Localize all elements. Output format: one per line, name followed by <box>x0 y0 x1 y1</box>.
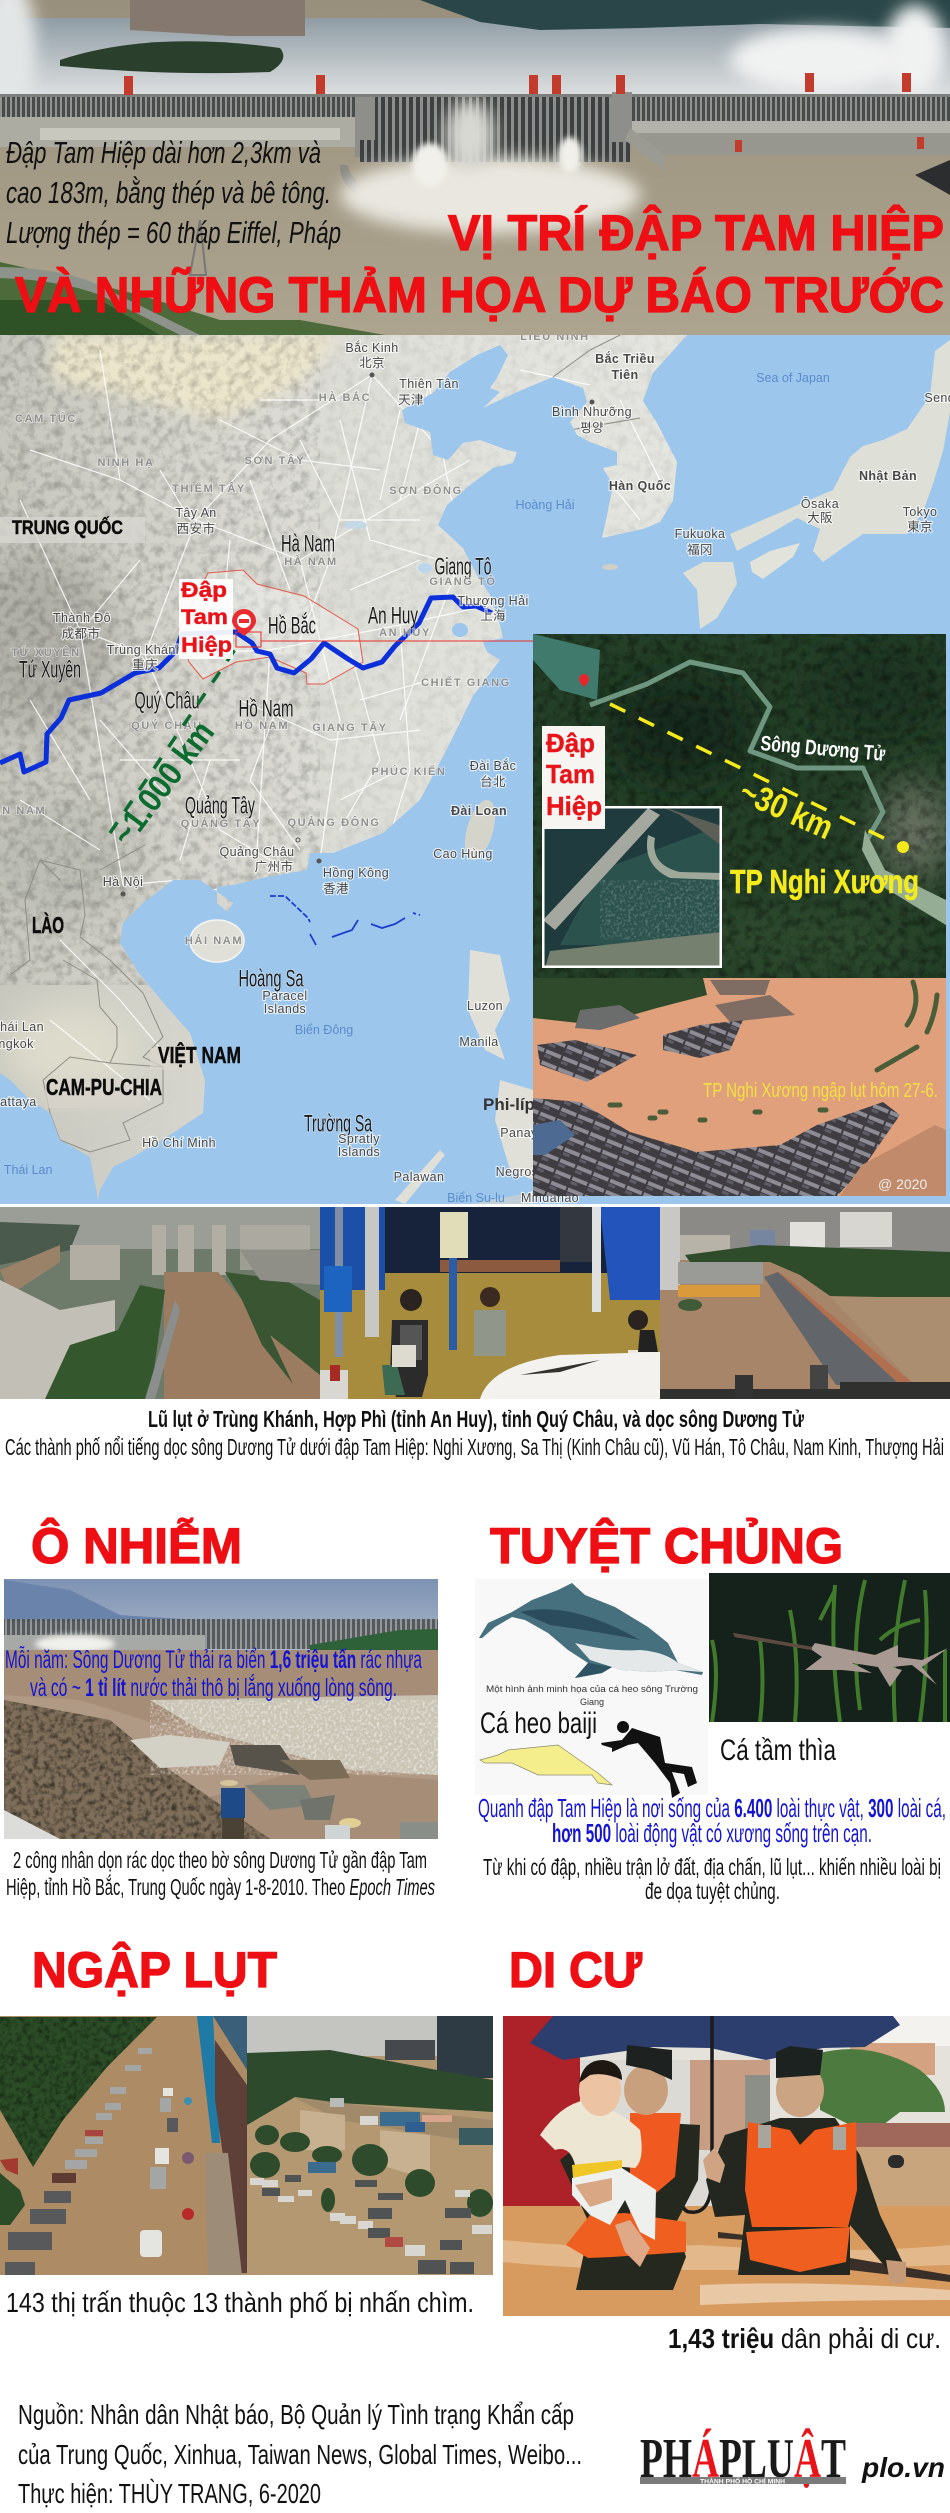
map labels: Panay <box>500 1126 538 1140</box>
map labels: GIANG TÔ <box>429 575 497 588</box>
map labels: Negros <box>496 1165 538 1179</box>
map labels: Đài Loan <box>451 804 507 818</box>
map labels: 大阪 <box>807 511 833 525</box>
photo: paddlefish <box>709 1573 950 1722</box>
map labels: GIANG TÂY <box>312 721 388 734</box>
heading: flooding: NGẬP LỤT <box>32 1942 277 1998</box>
label: Đập Tam Hiệp on satellite: Tam <box>546 759 595 789</box>
map labels: Hà Nam <box>281 530 335 558</box>
label: 30 km: ~30 km <box>734 773 839 847</box>
river traces at sea <box>270 896 420 945</box>
map labels: Hồng Kông <box>323 866 389 880</box>
icon: dam location pin <box>232 609 256 636</box>
map labels: Bình Nhưỡng <box>552 405 632 419</box>
map labels: Phi-líp <box>483 1095 535 1114</box>
map labels: Spratly <box>338 1132 380 1146</box>
text: sources and credit <box>18 2399 582 2509</box>
Hubei province outline <box>179 570 363 684</box>
umbrella <box>530 2016 900 2060</box>
label: Đập Tam Hiệp on satellite: Hiệp <box>546 791 602 821</box>
map labels: Cao Hùng <box>433 847 493 861</box>
map labels: Sea of Japan <box>756 371 830 385</box>
map labels: Bắc Kinh <box>345 340 399 355</box>
text: sources and credit: Nguồn: Nhân dân Nhật báo, Bộ Quản lý Tình trạng Khẩn cấp <box>18 2399 574 2430</box>
map labels: PHÚC KIẾN <box>372 765 446 778</box>
text: dam facts: Lượng thép = 60 tháp Eiffel, Pháp <box>6 215 341 250</box>
map labels: Biển Đông <box>295 1023 353 1037</box>
label: Đập Tam Hiệp on satellite <box>542 726 605 829</box>
map labels: Tiên <box>611 368 639 382</box>
text: dam facts <box>6 135 341 250</box>
caption: dolphin illustration: Giang <box>580 1697 604 1707</box>
label: Đập Tam Hiệp on map <box>179 579 233 659</box>
map labels: Đài Bắc <box>470 758 516 773</box>
icon: diver silhouette <box>601 1721 697 1798</box>
map labels: Thành Đô <box>53 611 111 625</box>
map labels: Nhật Bản <box>859 469 917 483</box>
map labels: Luzon <box>467 999 503 1013</box>
map labels: 北京 <box>359 356 385 370</box>
map labels: 广州市 <box>255 859 293 874</box>
heading: migration: DI CƯ <box>509 1942 642 1998</box>
locator link from dam to inset <box>236 632 533 647</box>
map labels: Bắc Triều <box>595 351 655 366</box>
map labels: Giang Tô <box>434 554 492 580</box>
map labels: 東京 <box>907 520 933 534</box>
map labels: Quý Châu <box>134 688 200 714</box>
text: dam facts: Đập Tam Hiệp dài hơn 2,3km và <box>6 135 321 170</box>
map labels: Islands <box>338 1145 380 1159</box>
map labels: 西安市 <box>177 521 215 536</box>
map labels: Mindanao <box>521 1191 579 1205</box>
caption: garbage photo <box>6 1847 435 1900</box>
map labels: 天津 <box>398 393 424 407</box>
photo: flooded car park <box>247 2016 493 2275</box>
caption: dolphin illustration: Một hình ảnh minh họa của cá heo sông Trường <box>486 1684 698 1694</box>
photo: flooded street <box>0 2016 247 2275</box>
map labels: Paracel <box>262 989 308 1003</box>
map labels: Hồ Nam <box>238 696 294 722</box>
caption: towns submerged: 143 thị trấn thuộc 13 thành phố bị nhấn chìm. <box>6 2287 474 2318</box>
map labels: 重庆 <box>132 657 158 672</box>
map labels: Tây An <box>175 506 217 520</box>
panel: map of China and East Asia <box>0 330 950 1205</box>
map labels: TỨ XUYÊN <box>11 646 81 659</box>
distance line 1000 km: ~1.000 km <box>104 714 222 853</box>
text: sources and credit: của Trung Quốc, Xinhua, Taiwan News, Global Times, Weibo... <box>18 2439 582 2470</box>
map labels: Tokyo <box>903 505 937 519</box>
photo: flood in Hefei <box>320 1207 660 1399</box>
map labels: Hàn Quốc <box>609 479 671 493</box>
callout: waste figures <box>5 1645 422 1702</box>
title: VỊ TRÍ ĐẬP TAM HIỆP <box>448 205 944 261</box>
logo: plo.vn: plo.vn <box>861 2452 945 2483</box>
map labels: SƠN ĐÔNG <box>389 484 463 497</box>
map labels: Palawan <box>394 1170 444 1184</box>
map labels: NINH HẠ <box>97 457 155 469</box>
panel: flood photo of Yichang <box>533 978 946 1196</box>
photo: flood along Yangtze bridge <box>660 1207 950 1399</box>
text: dam facts: cao 183m, bằng thép và bê tông. <box>6 175 331 210</box>
map labels: Hà Nội <box>103 875 143 889</box>
map labels: An Huy <box>368 602 418 630</box>
photo: garbage along the Yangtze <box>4 1579 438 1840</box>
label: paddlefish: Cá tầm thìa <box>720 1734 836 1767</box>
heading: extinction: TUYỆT CHỦNG <box>490 1517 843 1574</box>
map labels: Islands <box>264 1002 306 1016</box>
map labels: CAM TÚC <box>15 412 77 425</box>
text: extinction threat: đe dọa tuyệt chủng. <box>645 1878 780 1904</box>
map labels: THIỂM TÂY <box>172 482 246 495</box>
caption: garbage photo: Hiệp, tỉnh Hồ Bắc, Trung Quốc ngày 1-8-2010. Theo Epoch Times <box>6 1874 435 1900</box>
panel: satellite inset <box>533 634 950 978</box>
map labels: HỒ NAM <box>235 719 289 732</box>
panel: hero photo of Three Gorges dam <box>0 0 950 335</box>
label: Đập Tam Hiệp on satellite: Đập <box>546 728 595 758</box>
map labels: Trường Sa <box>304 1110 372 1138</box>
text: sources and credit: Thực hiện: THÙY TRANG, 6-2020 <box>18 2478 321 2509</box>
country label: Lào: LÀO <box>32 911 64 938</box>
map labels: AN HUY <box>379 627 431 639</box>
map labels: Hồ Bắc <box>268 612 316 640</box>
title <box>15 205 944 323</box>
label: baiji: Cá heo baiji <box>480 1707 597 1740</box>
logo: Pháp Luật: THÀNH PHỐ HỒ CHÍ MINH <box>700 2478 785 2486</box>
photo: soldiers evacuating child under umbrella <box>503 2016 950 2316</box>
map labels: 香港 <box>323 882 349 896</box>
label: Đập Tam Hiệp on map: Tam <box>181 606 228 629</box>
map labels: QUẢNG ĐÔNG <box>288 816 380 829</box>
map labels: Quảng Châu <box>220 845 294 859</box>
map labels: Quảng Tây <box>185 792 255 820</box>
map labels: Hoàng Hải <box>515 498 575 512</box>
watermark: @ 2020 <box>878 1176 927 1192</box>
map labels: CHIẾT GIANG <box>421 676 511 689</box>
soldier left with child <box>540 2045 700 2290</box>
text: extinction threat <box>483 1854 941 1904</box>
map labels: Hồ Chí Minh <box>142 1136 216 1150</box>
country label: Cam-pu-chia: CAM-PU-CHIA <box>46 1074 162 1100</box>
map labels: Trùng Khánh <box>107 643 183 657</box>
illustration: baiji dolphin <box>479 1583 703 1678</box>
heading: pollution: Ô NHIỄM <box>31 1517 242 1574</box>
map labels: HÀ BẮC <box>319 391 371 404</box>
map labels: LIÊU NINH <box>520 330 590 343</box>
map labels: Tứ Xuyên <box>19 656 81 684</box>
aerial photo of the dam <box>542 806 722 968</box>
text: species figures <box>478 1793 946 1848</box>
map labels: 上海 <box>480 608 506 623</box>
country label: Việt Nam: VIỆT NAM <box>158 1041 241 1068</box>
label: Yangtze: Sông Dương Tử <box>760 732 887 766</box>
icon: dolphin size silhouette <box>480 1745 612 1785</box>
soldier right <box>703 2046 906 2283</box>
map labels: Biển Su-lu <box>447 1191 505 1205</box>
caption: garbage photo: 2 công nhân dọn rác dọc theo bờ sông Dương Tử gần đập Tam <box>13 1847 427 1873</box>
callout: waste figures: Mỗi năm: Sông Dương Tử thải ra biển 1,6 triệu tấn rác nhựa <box>5 1645 422 1674</box>
label: Đập Tam Hiệp on map: Hiệp <box>181 634 232 657</box>
map labels <box>0 330 950 1205</box>
map labels: 台北 <box>480 774 506 789</box>
map labels: Thiên Tân <box>399 377 459 391</box>
icon: pin on satellite <box>579 674 589 687</box>
map labels: QUÝ CHÂU <box>131 719 203 732</box>
caption: dolphin illustration <box>486 1684 698 1707</box>
illustration: paddlefish <box>733 1633 948 1687</box>
country label: Trung Quốc: TRUNG QUỐC <box>12 517 123 539</box>
map labels: Thượng Hải <box>457 594 529 608</box>
map labels: Hoàng Sa <box>238 966 304 992</box>
callout: waste figures: và có ~ 1 tỉ lít nước thải thô bị lắng xuống lòng sông. <box>30 1673 397 1702</box>
map labels: Fukuoka <box>675 527 725 541</box>
label: Đập Tam Hiệp on map: Đập <box>181 579 227 602</box>
map labels: QUẢNG TÂY <box>181 817 261 830</box>
logo: Pháp Luật: PHÁPLUẬT <box>640 2427 846 2490</box>
map labels: HÀ NAM <box>284 555 338 568</box>
map labels: Ōsaka <box>801 497 839 511</box>
river: Yangtze route <box>0 597 492 772</box>
map labels: 成都市 <box>62 626 100 641</box>
map labels: 평양 <box>580 421 604 435</box>
map labels: HẢI NAM <box>185 934 243 947</box>
satellite distance line <box>610 704 900 846</box>
map labels: 福冈 <box>687 542 713 557</box>
map labels: Manila <box>459 1035 499 1049</box>
map labels: SƠN TÂY <box>245 454 305 467</box>
panel: baiji dolphin <box>475 1579 708 1798</box>
map landmass <box>0 335 700 1205</box>
photo: flood in Chongqing <box>0 1207 320 1399</box>
